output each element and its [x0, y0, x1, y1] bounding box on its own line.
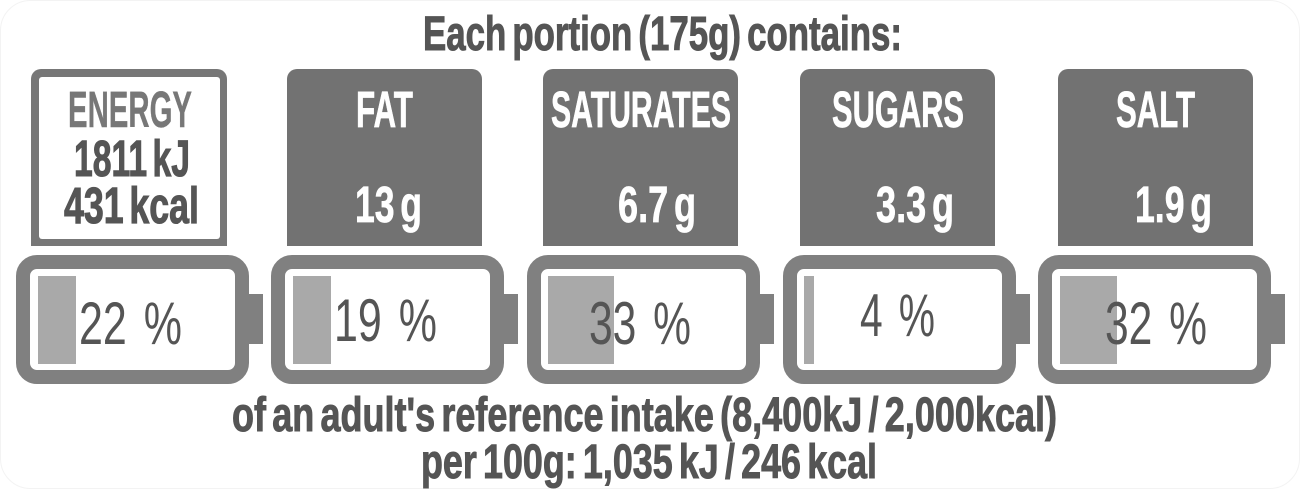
panel: sugars: 3.3 g: [876, 176, 954, 233]
per 100g note: per 100g: 1,035 kJ / 246 kcal: [421, 436, 877, 489]
battery: energy 22%: 22 %: [79, 290, 182, 357]
battery: saturates 33%: 33 %: [589, 290, 691, 357]
battery: salt 32%: [1045, 262, 1285, 377]
panel: salt: SALT: [1116, 81, 1195, 138]
panel: sugars: SUGARS: [832, 81, 964, 138]
panel: energy: ENERGY: [68, 81, 192, 138]
panel: fat: 13 g: [355, 176, 422, 233]
battery: sugars 4%: [790, 262, 1030, 377]
battery: saturates 33%: [534, 262, 774, 377]
panel: saturates: [543, 69, 738, 246]
battery: salt 32%: 32 %: [1105, 290, 1207, 357]
panel: energy: 1811 kJ: [74, 130, 190, 187]
reference intake note: of an adult's reference intake (8,400kJ / 2,000kcal): [232, 389, 1057, 442]
panel: saturates: SATURATES: [551, 81, 731, 138]
title: Each portion (175g) contains:: [423, 8, 902, 61]
panel: fat: [287, 69, 482, 246]
panel: salt: 1.9 g: [1135, 176, 1212, 233]
panel: fat: FAT: [356, 81, 413, 138]
battery: energy 22%: [23, 262, 263, 377]
panel: saturates: 6.7 g: [618, 176, 696, 233]
battery: sugars 4%: 4 %: [860, 282, 935, 349]
panel: sugars: [800, 69, 995, 246]
panel: energy: 431 kcal: [64, 177, 199, 234]
battery: fat 19%: [278, 262, 518, 377]
battery: fat 19%: 19 %: [334, 287, 437, 354]
panel: energy: [31, 69, 227, 246]
panel: salt: [1058, 69, 1253, 246]
